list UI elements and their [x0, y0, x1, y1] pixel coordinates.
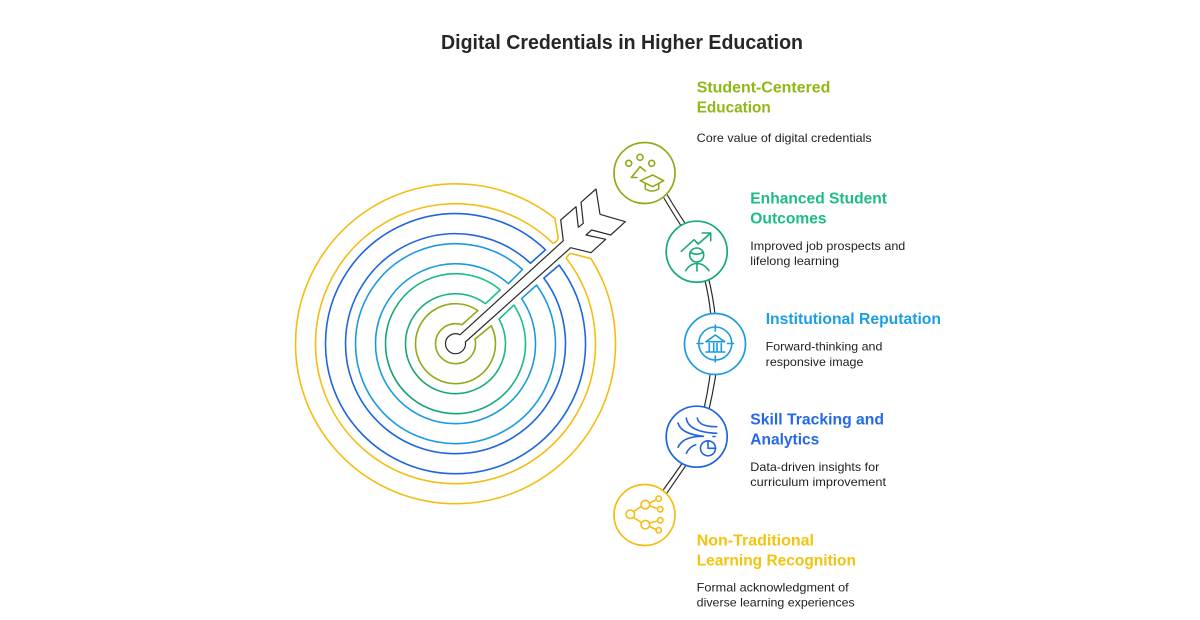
arrow [446, 189, 625, 354]
heading: Outcomes [750, 210, 827, 227]
connector: double curved line [663, 194, 716, 493]
ring: olive [416, 304, 496, 384]
heading: Education [697, 100, 771, 117]
label: institutional reputation [766, 311, 941, 369]
ring: light blue [356, 244, 555, 444]
description: responsive image [766, 355, 864, 369]
heading: Non-Traditional [697, 533, 814, 550]
description: Formal acknowledgment of [697, 581, 849, 595]
description: Improved job prospects and [750, 239, 905, 253]
target chart [296, 184, 625, 504]
heading: Institutional Reputation [766, 311, 941, 328]
icon: skill tracking and analytics [666, 406, 727, 467]
icon: non-traditional learning recognition [614, 484, 675, 546]
description: Core value of digital credentials [697, 131, 872, 145]
icon: student-centered education [614, 142, 675, 204]
icon: institutional reputation [684, 314, 746, 374]
label: enhanced student outcomes [750, 190, 905, 268]
title: Digital Credentials in Higher Education [441, 32, 803, 54]
ring: blue [326, 214, 586, 474]
label: student-centered education [697, 80, 872, 145]
description: lifelong learning [750, 254, 839, 268]
heading: Skill Tracking and [750, 412, 884, 429]
heading: Student-Centered [697, 80, 830, 97]
heading: Learning Recognition [697, 553, 856, 570]
description: curriculum improvement [750, 475, 887, 489]
heading: Analytics [750, 432, 819, 449]
description: diverse learning experiences [697, 596, 855, 610]
description: Data-driven insights for [750, 460, 879, 474]
ring: yellow [296, 184, 616, 504]
heading: Enhanced Student [750, 190, 888, 207]
description: Forward-thinking and [766, 340, 882, 354]
label: non-traditional learning recognition [697, 533, 856, 610]
icon: enhanced student outcomes [666, 221, 727, 282]
label: skill tracking and analytics [750, 412, 887, 489]
ring: green [386, 274, 525, 414]
